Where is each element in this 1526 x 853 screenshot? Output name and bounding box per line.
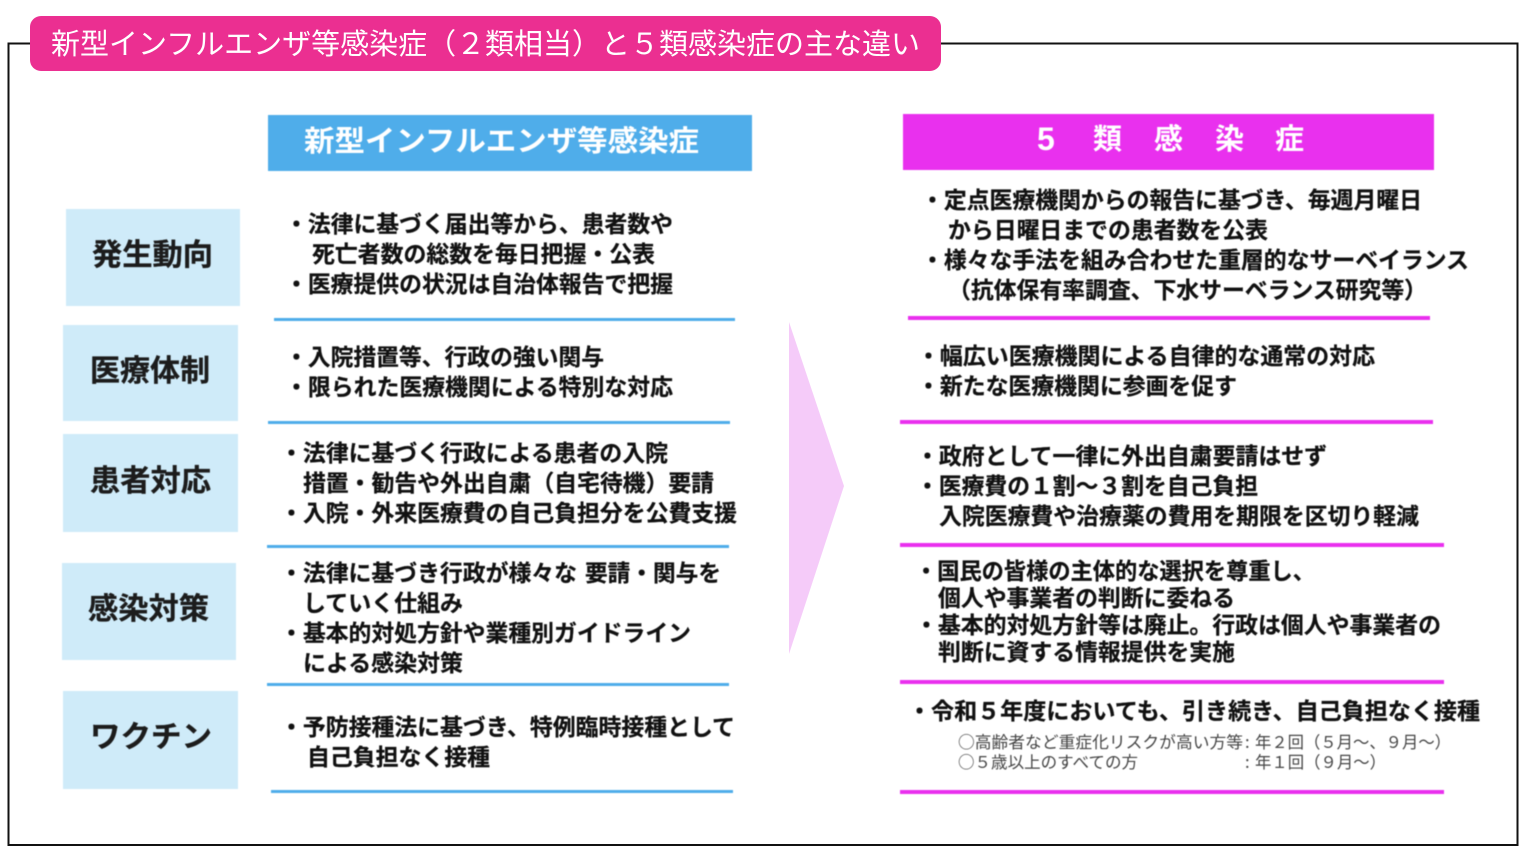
column header: 新型インフルエンザ等感染症 [268,115,752,171]
text block: ワクチン: 自己負担なく接種 [307,744,490,770]
column header: 5類感染症: 感 [1154,123,1183,156]
text block: 感染対策: 要請・関与を [585,560,721,586]
label: 医療体制: 医療体制 [90,355,210,388]
column header: 5類感染症: 5 [1037,121,1055,157]
text block: ワクチン [280,714,735,770]
title banner [30,16,941,71]
column header: 5類感染症: 染 [1215,123,1244,156]
text block: 感染対策: ・基本的対処方針や業種別ガイドライン [280,620,691,646]
text block: 医療体制 [285,344,673,400]
label: ワクチン [63,691,238,789]
label: 発生動向: 発生動向 [92,239,213,272]
text block: ワクチン: ○５歳以上のすべての方 [958,749,1138,773]
text block: ワクチン: ・令和５年度においても、引き続き、自己負担なく接種 [908,698,1480,724]
text block: 患者対応 [280,440,737,526]
text block: 感染対策: していく仕組み [303,590,463,616]
text block: 患者対応: ・法律に基づく行政による患者の入院 [280,440,668,466]
text block: 発生動向: から日曜日までの患者数を公表 [948,217,1268,243]
text block: 患者対応: 入院医療費や治療薬の費用を期限を区切り軽減 [939,503,1419,529]
text block: 発生動向: ・医療提供の状況は自治体報告で把握 [285,271,673,297]
text block: ワクチン [908,698,1480,773]
text block: 感染対策: ・法律に基づき行政が様々な [280,560,577,586]
column header: 5類感染症: 症 [1275,123,1304,156]
text block: 感染対策: 判断に資する情報提供を実施 [938,639,1235,665]
text block: 発生動向: ・様々な手法を組み合わせた重層的なサーベイランス [921,247,1469,273]
text block: 患者対応: ・入院・外来医療費の自己負担分を公費支援 [280,500,737,526]
text block: 患者対応 [916,443,1419,529]
text block: ワクチン: : [1245,749,1250,773]
text block: 感染対策: ・基本的対処方針等は廃止。行政は個人や事業者の [915,612,1441,638]
title banner: 新型インフルエンザ等感染症（２類相当）と５類感染症の主な違い [51,28,920,61]
text block: 発生動向: ・定点医療機関からの報告に基づき、毎週月曜日 [921,187,1422,213]
label: 感染対策: 感染対策 [88,593,209,626]
text block: 医療体制 [917,343,1375,399]
label: 医療体制 [63,325,238,421]
text block: 医療体制: ・限られた医療機関による特別な対応 [285,374,673,400]
text block: 感染対策: ・国民の皆様の主体的な選択を尊重し、 [915,558,1315,584]
panel: row labels [62,209,240,789]
label: ワクチン: ワクチン [90,721,212,754]
text block: 発生動向: 死亡者数の総数を毎日把握・公表 [312,241,655,267]
label: 感染対策 [62,563,236,660]
text block: 発生動向: （抗体保有率調査、下水サーベランス研究等） [948,277,1427,303]
text block: ワクチン: : [1245,729,1250,753]
text block: 医療体制: ・入院措置等、行政の強い関与 [285,344,604,370]
panel: 5類感染症 column [900,114,1480,794]
text block: 発生動向 [285,211,673,297]
label: 発生動向 [66,209,240,306]
text block: 発生動向 [921,187,1469,303]
text block: 患者対応: ・医療費の１割～３割を自己負担 [916,473,1258,499]
text block: 感染対策: による感染対策 [303,650,463,676]
text block: 感染対策: 個人や事業者の判断に委ねる [938,585,1235,611]
label: 患者対応 [63,434,238,532]
column header: 新型インフルエンザ等感染症: 新型インフルエンザ等感染症 [304,125,699,158]
arrow [789,322,844,654]
text block: ワクチン: ○高齢者など重症化リスクが高い方等 [958,729,1243,753]
column header: 5類感染症: 類 [1093,123,1122,156]
text block: ワクチン: 年１回（９月～） [1255,749,1386,773]
text block: ワクチン: 年２回（５月～、９月～） [1255,729,1451,753]
text block: 発生動向: ・法律に基づく届出等から、患者数や [285,211,673,237]
text block: 感染対策 [280,560,721,676]
text block: 患者対応: ・政府として一律に外出自粛要請はせず [916,443,1327,469]
text block: ワクチン: ・予防接種法に基づき、特例臨時接種として [280,714,735,740]
column header: 5類感染症 [903,114,1434,170]
text block: 医療体制: ・幅広い医療機関による自律的な通常の対応 [917,343,1375,369]
text block: 医療体制: ・新たな医療機関に参画を促す [917,373,1237,399]
label: 患者対応: 患者対応 [90,465,211,498]
panel: 新型インフルエンザ等感染症 column [267,115,752,793]
text block: 感染対策 [915,558,1441,665]
text block: 患者対応: 措置・勧告や外出自粛（自宅待機）要請 [303,470,714,496]
